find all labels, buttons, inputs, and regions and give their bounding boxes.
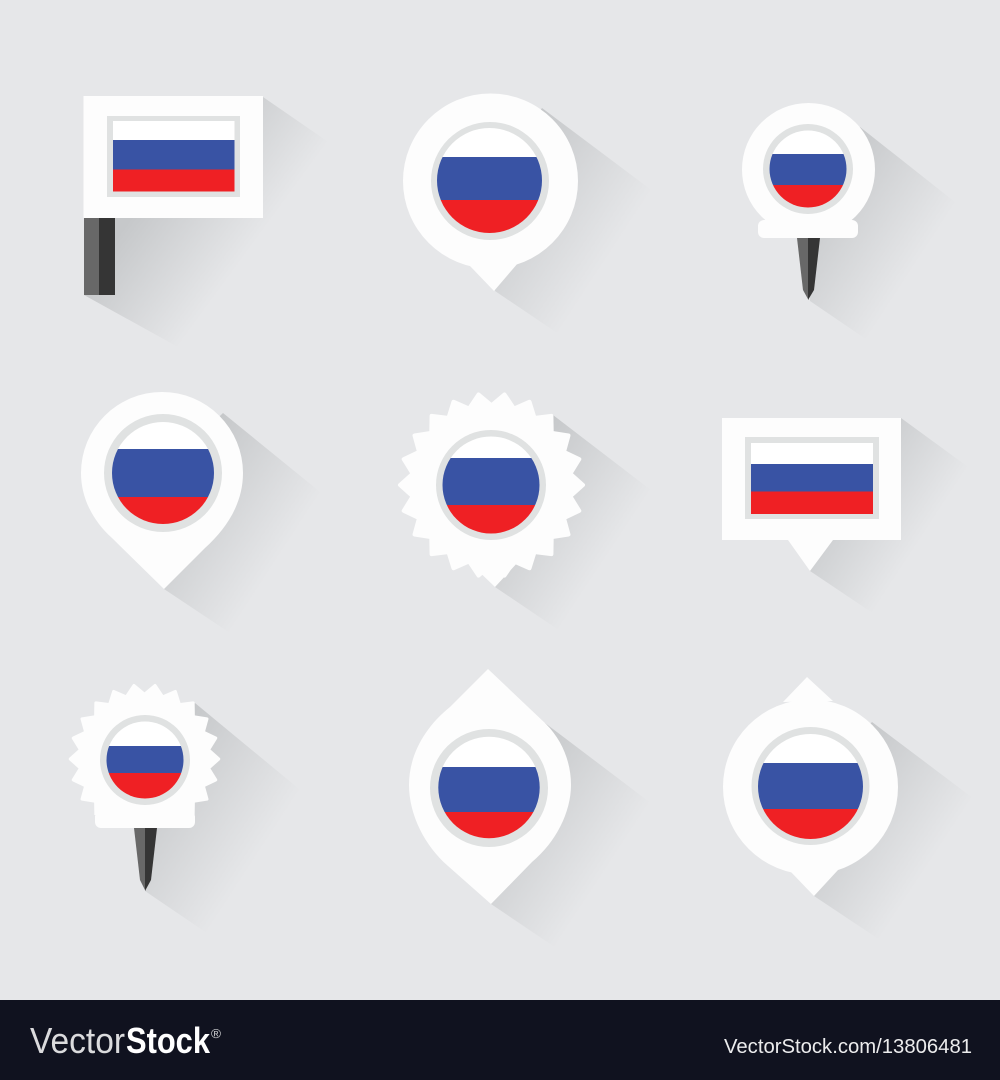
icon: flag on pole — [84, 96, 337, 352]
long shadow — [489, 723, 660, 954]
logo wordmark: ® — [211, 1026, 221, 1041]
round flag — [752, 727, 870, 845]
logo wordmark: Stock — [126, 1020, 211, 1061]
round flag — [430, 120, 550, 240]
footer band — [0, 1000, 1000, 1080]
logo wordmark — [30, 1020, 221, 1061]
round flag — [763, 124, 853, 214]
icon: starburst map pointer — [398, 392, 626, 612]
icon: large double pointed pointer — [723, 677, 946, 921]
white flag panel — [84, 96, 263, 218]
round flag — [430, 729, 548, 847]
pin needle — [797, 238, 820, 300]
icon: starburst push pin — [68, 684, 274, 914]
icon: round push pin — [742, 103, 930, 322]
pointer body — [81, 392, 243, 589]
long shadow — [491, 415, 660, 637]
Russian flag — [745, 437, 879, 519]
round flag — [100, 715, 190, 805]
round flag — [104, 414, 222, 532]
image id: VectorStock.com/13806481 — [724, 1035, 972, 1058]
pointer body — [403, 94, 578, 291]
long shadow — [490, 108, 662, 341]
pole — [84, 218, 115, 295]
long shadow — [810, 722, 982, 946]
long shadow — [84, 97, 337, 352]
icon: teardrop map pointer — [81, 392, 296, 614]
long shadow — [145, 703, 310, 940]
pointer body — [723, 677, 898, 896]
icon: double pointed pointer — [409, 669, 624, 928]
logo wordmark: Vector — [30, 1020, 125, 1061]
pin needle — [134, 828, 157, 891]
long shadow — [810, 418, 975, 618]
icon: rectangular speech pointer — [722, 418, 975, 618]
starburst pin head — [70, 684, 219, 834]
pin head — [742, 103, 875, 238]
long shadow — [162, 413, 330, 639]
pointer body — [409, 669, 571, 904]
round flag — [436, 430, 546, 540]
Russian flag — [107, 116, 240, 197]
icon: round map pointer — [403, 94, 624, 314]
pointer body — [722, 418, 901, 571]
long shadow — [808, 127, 965, 346]
starburst body — [400, 393, 583, 587]
